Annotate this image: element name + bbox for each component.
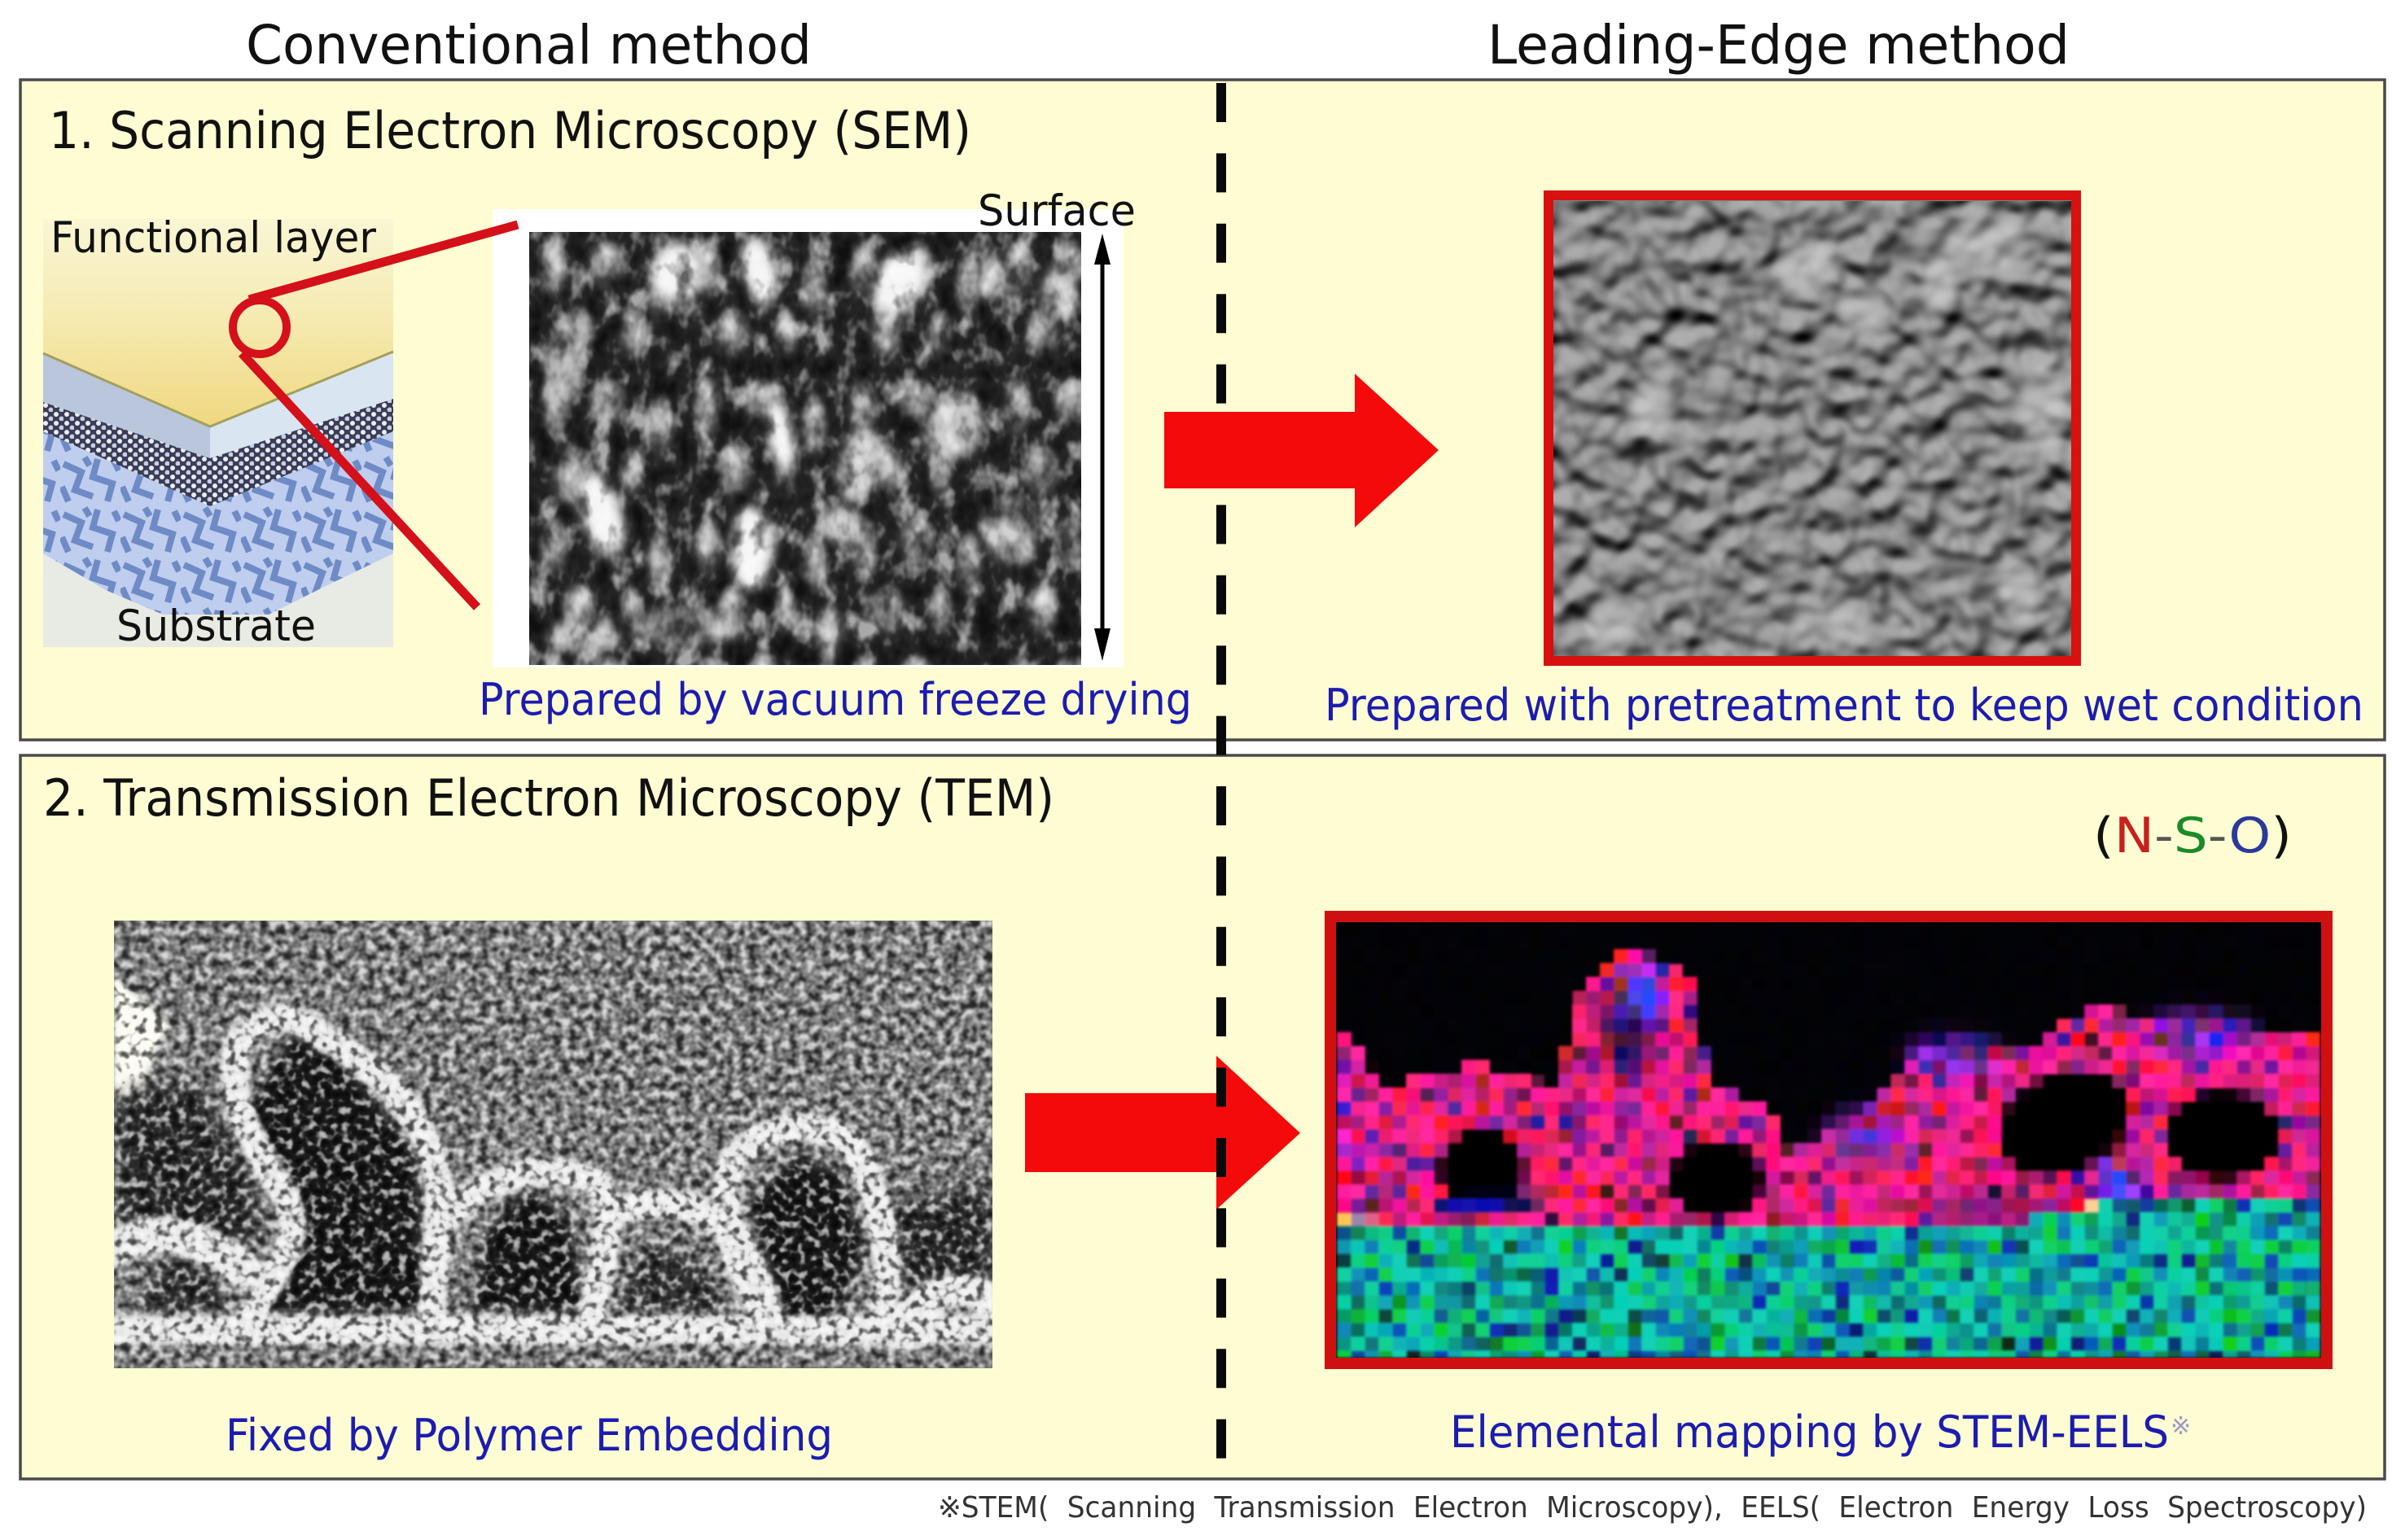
label: functional layer: Functional layer [50, 213, 376, 263]
heading: SEM: 1. Scanning Electron Microscopy (SEM) [49, 101, 971, 160]
column heading: leading-edge method: Leading-Edge method [1487, 14, 2070, 77]
label: surface: Surface [978, 186, 1136, 236]
panel: SEM [20, 80, 2385, 740]
caption: pretreatment: Prepared with pretreatment to keep wet condition [1325, 680, 2363, 731]
legend: N-S-O: (N-S-O) [2093, 807, 2292, 864]
column heading: conventional method: Conventional method [246, 14, 812, 77]
red arrow: conventional to leading-edge SEM [1164, 374, 1439, 527]
map pixels [1330, 922, 2321, 1358]
SEM image: leading-edge [1531, 179, 2094, 677]
elemental map: STEM-EELS [1330, 917, 2327, 1363]
reference mark: ※ [2171, 1412, 2191, 1441]
dashed divider [1216, 83, 1226, 1462]
caption: vacuum freeze drying: Prepared by vacuum freeze drying [479, 674, 1192, 725]
heading: TEM: 2. Transmission Electron Microscopy (TEM) [43, 768, 1054, 828]
label: substrate: Substrate [116, 602, 316, 651]
panel background: SEM [20, 80, 2385, 740]
callout lines and circle [233, 225, 518, 607]
caption: STEM-EELS: Elemental mapping by STEM-EELS [1450, 1407, 2169, 1458]
double arrow: depth [1094, 234, 1111, 661]
SEM image: conventional [493, 209, 1124, 667]
TEM image: polymer embedding [114, 921, 992, 1368]
caption: polymer embedding: Fixed by Polymer Embedding [226, 1410, 833, 1461]
footnote: ※STEM( Scanning Transmission Electron Microscopy), EELS( Electron Energy Loss Spectroscopy) [938, 1491, 2367, 1525]
panel background: TEM [20, 755, 2385, 1479]
panel: TEM [20, 755, 2385, 1479]
illustration: membrane layers [43, 219, 393, 647]
red arrow: conventional to leading-edge TEM [1025, 1056, 1300, 1210]
